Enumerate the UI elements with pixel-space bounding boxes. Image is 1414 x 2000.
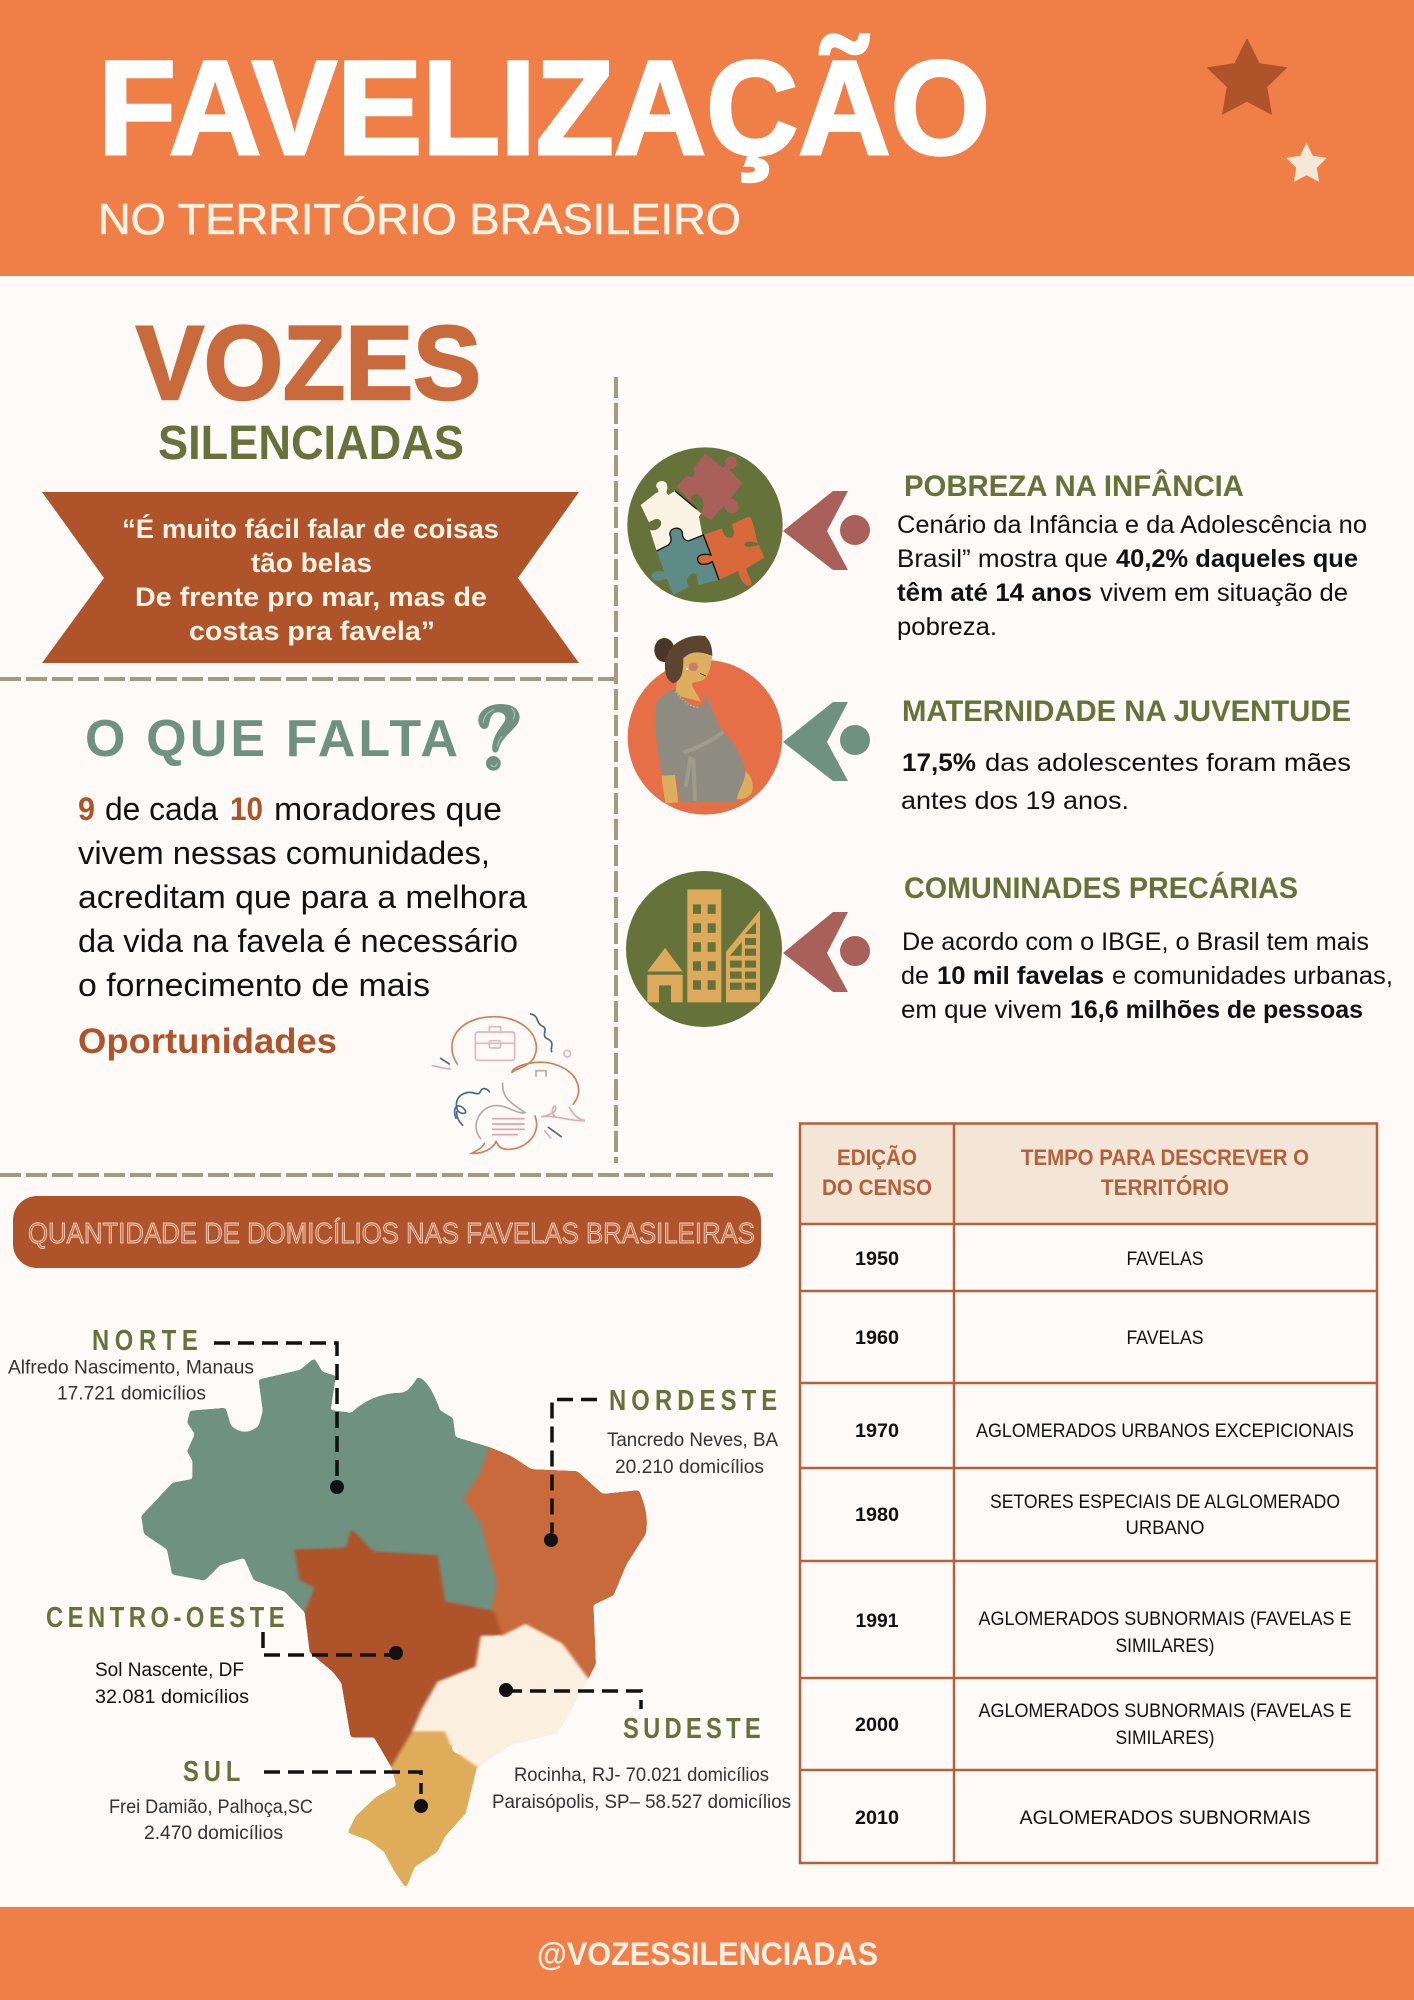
title pill: quantidade de domicílios: QUANTIDADE DE DOMICÍLIOS NAS FAVELAS BRASILEIRAS [28,1217,755,1250]
icon: puzzle circle [627,447,783,603]
callout: nordeste: NORDESTE [609,1384,777,1417]
icon: dark star [1208,39,1286,114]
region: sul [349,1732,476,1886]
icon: light star [1287,144,1326,181]
callout: norte: Alfredo Nascimento, Manaus [8,1356,254,1378]
table header: DO CENSO [822,1175,932,1200]
table row 1980: SETORES ESPECIAIS DE ALGLOMERADO [990,1492,1340,1513]
heading: vozes silenciadas [136,305,481,470]
callout: centro-oeste [46,1601,403,1708]
table row 1980 [855,1492,1340,1539]
table row 1950: FAVELAS [1126,1249,1204,1270]
heading: MATERNIDADE NA JUVENTUDE [902,695,1351,728]
callout: sudeste: Paraisópolis, SP– 58.527 domicílios [492,1791,791,1813]
text block: o que falta: 9 [78,791,95,827]
callout: centro-oeste: 32.081 domicílios [95,1686,249,1708]
text block: o que falta: de cada [105,791,218,827]
text block: Brasil” mostra que [897,545,1108,573]
text block: em que vivem [901,996,1062,1024]
text block: Cenário da Infância e da Adolescência no [897,511,1367,539]
region: centro-oeste [296,1532,500,1767]
table row 2000: 2000 [855,1715,899,1736]
puzzle piece: rose [677,453,742,520]
table row 2010: 2010 [855,1808,899,1829]
table header: TERRITÓRIO [1101,1175,1229,1200]
table row 2000: SIMILARES) [1116,1728,1214,1749]
heading: POBREZA NA INFÂNCIA [904,469,1244,503]
icon: speech bubbles with briefcase [432,1014,585,1153]
heading: vozes silenciadas: SILENCIADAS [158,417,464,470]
text block [901,749,1351,815]
header band [0,0,1414,276]
table row 1991: 1991 [856,1611,899,1632]
table row 1980: URBANO [1126,1518,1204,1539]
text block: de [901,962,929,990]
table row 2000 [855,1701,1352,1749]
table header: TEMPO PARA DESCREVER O [1021,1145,1309,1170]
text block: e comunidades urbanas, [1112,962,1393,990]
callout: sudeste: SUDESTE [623,1712,761,1745]
text block [901,928,1393,1024]
callout: centro-oeste: CENTRO-OESTE [46,1601,285,1634]
table header [822,1145,1309,1200]
table row 1960: FAVELAS [1126,1328,1204,1349]
text block: o que falta: acreditam que para a melhora [78,879,527,915]
table row 2000: AGLOMERADOS SUBNORMAIS (FAVELAS E [978,1701,1352,1722]
subtitle: NO TERRITÓRIO BRASILEIRO [98,195,741,244]
text block: De acordo com o IBGE, o Brasil tem mais [902,928,1369,956]
table row 1950: 1950 [855,1249,899,1270]
icon: buildings [626,871,782,1027]
icon: arrow [783,702,870,781]
table row 1980: 1980 [855,1505,899,1526]
text block: têm até 14 anos [897,579,1092,607]
quote banner: tão belas [251,548,372,578]
icon: arrow [783,912,870,992]
text block: 16,6 milhões de pessoas [1070,996,1363,1024]
callout: nordeste: 20.210 domicílios [615,1456,764,1478]
table row 1970: AGLOMERADOS URBANOS EXCEPICIONAIS [976,1421,1354,1442]
callout: sul: 2.470 domicílios [144,1822,283,1844]
text block: 10 mil favelas [937,962,1104,990]
region: nordeste [465,1448,645,1679]
table row 1970: 1970 [855,1421,899,1442]
callout: sudeste: Rocinha, RJ- 70.021 domicílios [514,1764,769,1786]
heading: vozes silenciadas: VOZES [136,305,481,422]
text block: o que falta: da vida na favela é necessário [78,923,518,959]
item: pobreza na infância [627,447,1367,641]
quote banner: “É muito fácil falar de coisas [122,513,499,544]
region: norte [143,1360,499,1612]
footer band: @VOZESSILENCIADAS [537,1936,878,1972]
text block: pobreza. [897,613,997,641]
text block: vivem em situação de [1100,579,1348,607]
text block: 40,2% daqueles que [1116,545,1358,573]
text block: das adolescentes foram mães [985,749,1351,777]
callout: centro-oeste: Sol Nascente, DF [95,1659,244,1681]
table header: EDIÇÃO [837,1145,917,1170]
puzzle piece: orange [698,517,764,586]
heading: COMUNINADES PRECÁRIAS [904,871,1298,905]
callout: nordeste [544,1384,778,1547]
callout: norte: NORTE [92,1324,198,1357]
table row 2010 [855,1808,1310,1829]
table row 2010: AGLOMERADOS SUBNORMAIS [1020,1808,1310,1829]
callout: sul: Frei Damião, Palhoça,SC [109,1796,313,1818]
text block [897,511,1367,641]
title pill: quantidade de domicílios [13,1196,761,1268]
text block: o que falta: Oportunidades [78,1022,337,1061]
table row 1960: 1960 [855,1328,899,1349]
text block: o que falta: vivem nessas comunidades, [78,835,490,871]
title: FAVELIZAÇÃO [98,34,990,183]
quote banner: De frente pro mar, mas de [135,582,487,612]
text block: o que falta: o fornecimento de mais [78,967,430,1003]
table: census terms [800,1124,1377,1863]
puzzle piece: cream [641,481,702,551]
callout: sudeste [492,1683,791,1813]
icon: arrow [783,491,870,570]
text block: 17,5% [902,749,976,777]
icon: question mark [478,704,520,771]
item: comunidades precárias [626,871,1393,1027]
heading: o que falta: O QUE FALTA [85,710,458,768]
text block: o que falta: moradores que [274,791,502,827]
quote banner: costas pra favela” [189,616,435,646]
text block: antes dos 19 anos. [901,787,1129,815]
table row 1950 [855,1249,1204,1270]
callout: sul: SUL [183,1755,240,1788]
callout: sul [109,1755,428,1844]
quote banner [42,492,579,663]
table row 1991: SIMILARES) [1116,1636,1214,1657]
text block: o que falta [78,791,527,1061]
footer band [0,1907,1414,2000]
callout: norte: 17.721 domicílios [57,1382,206,1404]
icon: pregnant woman [628,636,782,815]
table row 1991 [856,1609,1352,1657]
table row 1991: AGLOMERADOS SUBNORMAIS (FAVELAS E [978,1609,1352,1630]
callout: norte [8,1324,344,1494]
item: maternidade na juventude [628,636,1351,815]
region: sudeste [413,1625,587,1767]
map of Brazil [143,1360,645,1886]
puzzle piece: teal [651,528,719,595]
callout: nordeste: Tancredo Neves, BA [607,1429,778,1451]
table row 1960 [855,1328,1204,1349]
text block: o que falta: 10 [230,791,263,827]
